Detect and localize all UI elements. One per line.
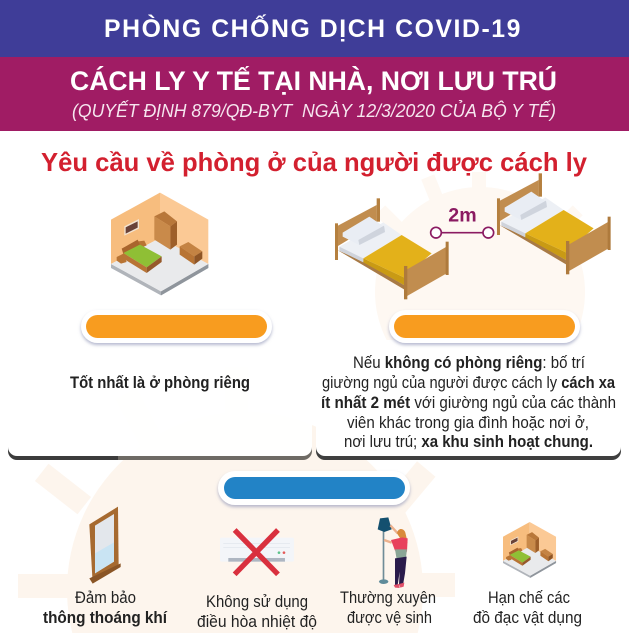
text: private room: Tốt nhất là ở phòng riêng [70, 374, 250, 392]
text: cleaning: Thường xuyên [340, 589, 436, 607]
icon: isometric room [111, 193, 208, 295]
icon: two beds two metres apart [335, 173, 611, 299]
icon: person cleaning a lamp [378, 517, 408, 588]
panel: no private room [316, 310, 621, 460]
background virus motif: top right [375, 172, 585, 397]
text: no private room: giường ngủ của người được cách ly cách xa [322, 374, 616, 392]
header band: magenta [0, 57, 629, 131]
blue label pill [218, 471, 410, 505]
header band: blue [0, 0, 629, 57]
decision reference: (QUYẾT ĐỊNH 879/QĐ-BYT NGÀY 12/3/2020 CỦA BỘ Y TẾ) [72, 100, 556, 121]
item: cleaning [340, 517, 436, 627]
text: no private room: ít nhất 2 mét với giường ngủ của các thành [321, 394, 616, 412]
orange label pill [389, 310, 580, 343]
bed two [497, 173, 611, 274]
distance marker [431, 205, 494, 238]
item: limit furniture [473, 522, 582, 627]
distance connector [431, 227, 494, 238]
text: no air conditioning: Không sử dụng [206, 593, 308, 611]
text: no private room: viên khác trong gia đình hoặc nơi ở, [347, 414, 589, 432]
text: no private room [321, 354, 616, 451]
text: no private room: nơi lưu trú; xa khu sinh hoạt chung. [344, 433, 593, 451]
item: cleaning: được vệ sinh [347, 609, 432, 627]
text: limit furniture: Hạn chế các [488, 589, 570, 607]
text: no private room: Nếu không có phòng riêng: bố trí [353, 354, 585, 372]
orange label pill [81, 310, 272, 343]
item: ventilation [43, 507, 168, 627]
item: limit furniture: đồ đạc vật dụng [473, 609, 582, 627]
distance label: 2m [448, 205, 477, 226]
text: ventilation: Đảm bảo [75, 589, 136, 607]
bed one [335, 198, 449, 299]
item: no air conditioning: điều hòa nhiệt độ [197, 613, 317, 631]
background virus motif: bottom centre [18, 367, 455, 633]
icon: crossed air conditioner [220, 530, 294, 574]
item: ventilation: thông thoáng khí [43, 609, 168, 627]
panel: private room [8, 310, 312, 460]
item: no air conditioning [197, 530, 317, 631]
icon: window [89, 507, 121, 584]
icon: small isometric room [503, 522, 556, 578]
section heading: Yêu cầu về phòng ở của người được cách ly [41, 147, 588, 177]
title: PHÒNG CHỐNG DỊCH COVID-19 [104, 13, 522, 43]
subtitle: CÁCH LY Y TẾ TẠI NHÀ, NƠI LƯU TRÚ [70, 66, 557, 96]
